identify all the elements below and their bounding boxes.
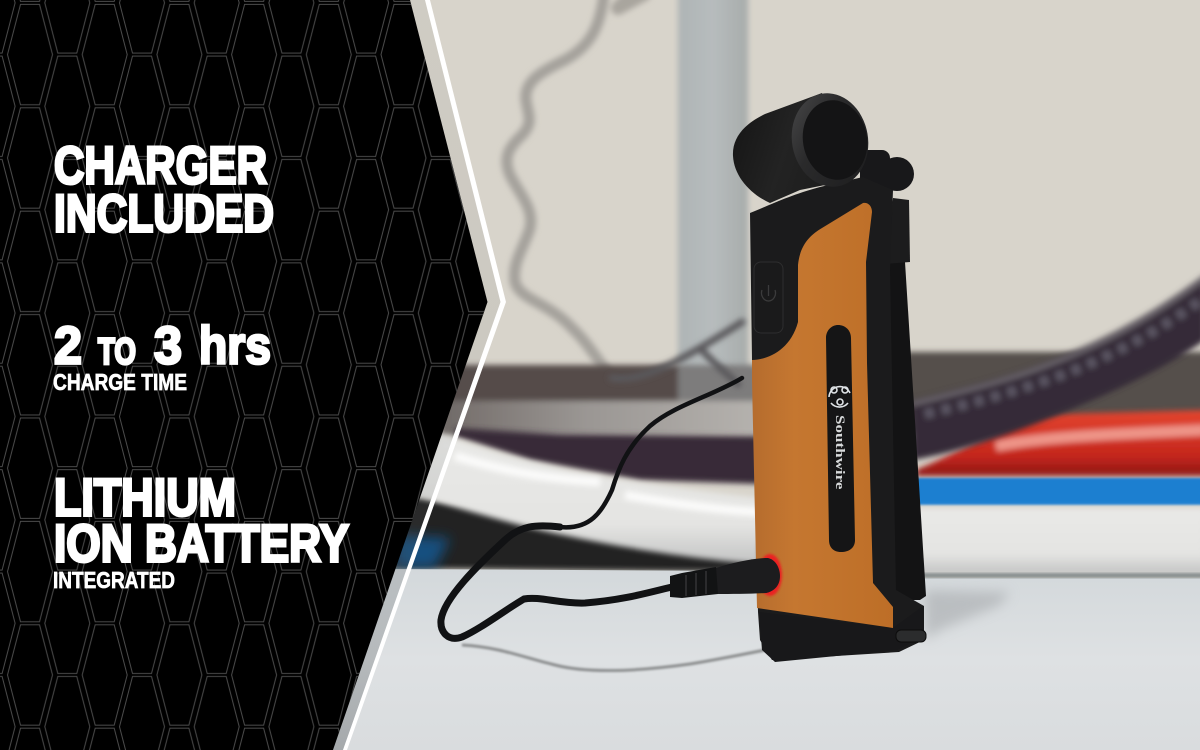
heading: lithium ion battery [54, 469, 349, 574]
white pipe highlight [455, 456, 760, 512]
red charging LED glow [758, 554, 782, 596]
subheading: integrated: INTEGRATED [53, 567, 175, 593]
hinge bracket [884, 198, 910, 264]
heading: 2 to 3 hrs: TO [98, 331, 136, 372]
heading: charger included: INCLUDED [54, 185, 274, 244]
heading: 2 to 3 hrs [54, 317, 271, 376]
head: barrel [733, 93, 850, 203]
barrel connector [716, 558, 780, 594]
heading: 2 to 3 hrs: 2 [54, 317, 82, 376]
purple-black hose, right [912, 274, 1200, 460]
heading: lithium ion battery: LITHIUM [54, 469, 236, 528]
Southwire logo mark [829, 387, 850, 407]
panel: black hexagon chevron [0, 0, 488, 750]
product: Southwire work light [670, 87, 926, 662]
rear leg [884, 262, 926, 600]
side knob [860, 150, 914, 191]
charging cable [441, 378, 742, 638]
connector strain relief [670, 567, 718, 598]
heading: lithium ion battery: ION BATTERY [54, 515, 349, 574]
strain relief ridges [686, 571, 706, 596]
heading: 2 to 3 hrs: hrs [199, 317, 271, 376]
head: face rim [784, 87, 876, 193]
text block: lithium ion battery [53, 469, 349, 593]
red hose, right [916, 410, 1200, 476]
foot base [759, 606, 924, 662]
blue hose, right [915, 478, 1200, 505]
metal pole behind the light [678, 0, 748, 390]
label slot [826, 325, 855, 552]
power icon [762, 285, 776, 301]
white pipe, right [915, 508, 1200, 574]
table surface [330, 569, 1200, 750]
translucent band between panel and stripe [333, 0, 506, 750]
dark shelf band [440, 352, 1200, 435]
cable shadow on the table [462, 645, 765, 671]
Southwire wordmark: Southwire [833, 415, 847, 490]
power button [754, 262, 783, 333]
foot pin [896, 630, 926, 642]
subheading: charge time: CHARGE TIME [53, 369, 187, 395]
heading: 2 to 3 hrs: 3 [154, 317, 182, 376]
dark band under the white pipe [380, 495, 780, 572]
blurred grey cable on the wall [507, 0, 644, 382]
head: lens face [797, 95, 873, 185]
purple-black hose, left segment [455, 428, 760, 484]
white pipe, left curve [415, 434, 760, 564]
orange grip [752, 203, 893, 628]
main black body [750, 177, 924, 660]
blurred charging cable behind [612, 322, 742, 384]
heading: charger included: CHARGER [54, 137, 267, 196]
blue hose behind, left [395, 535, 450, 568]
white chevron stripe [343, 0, 506, 750]
text block: charge time [53, 317, 271, 395]
heading: charger included [54, 137, 274, 244]
